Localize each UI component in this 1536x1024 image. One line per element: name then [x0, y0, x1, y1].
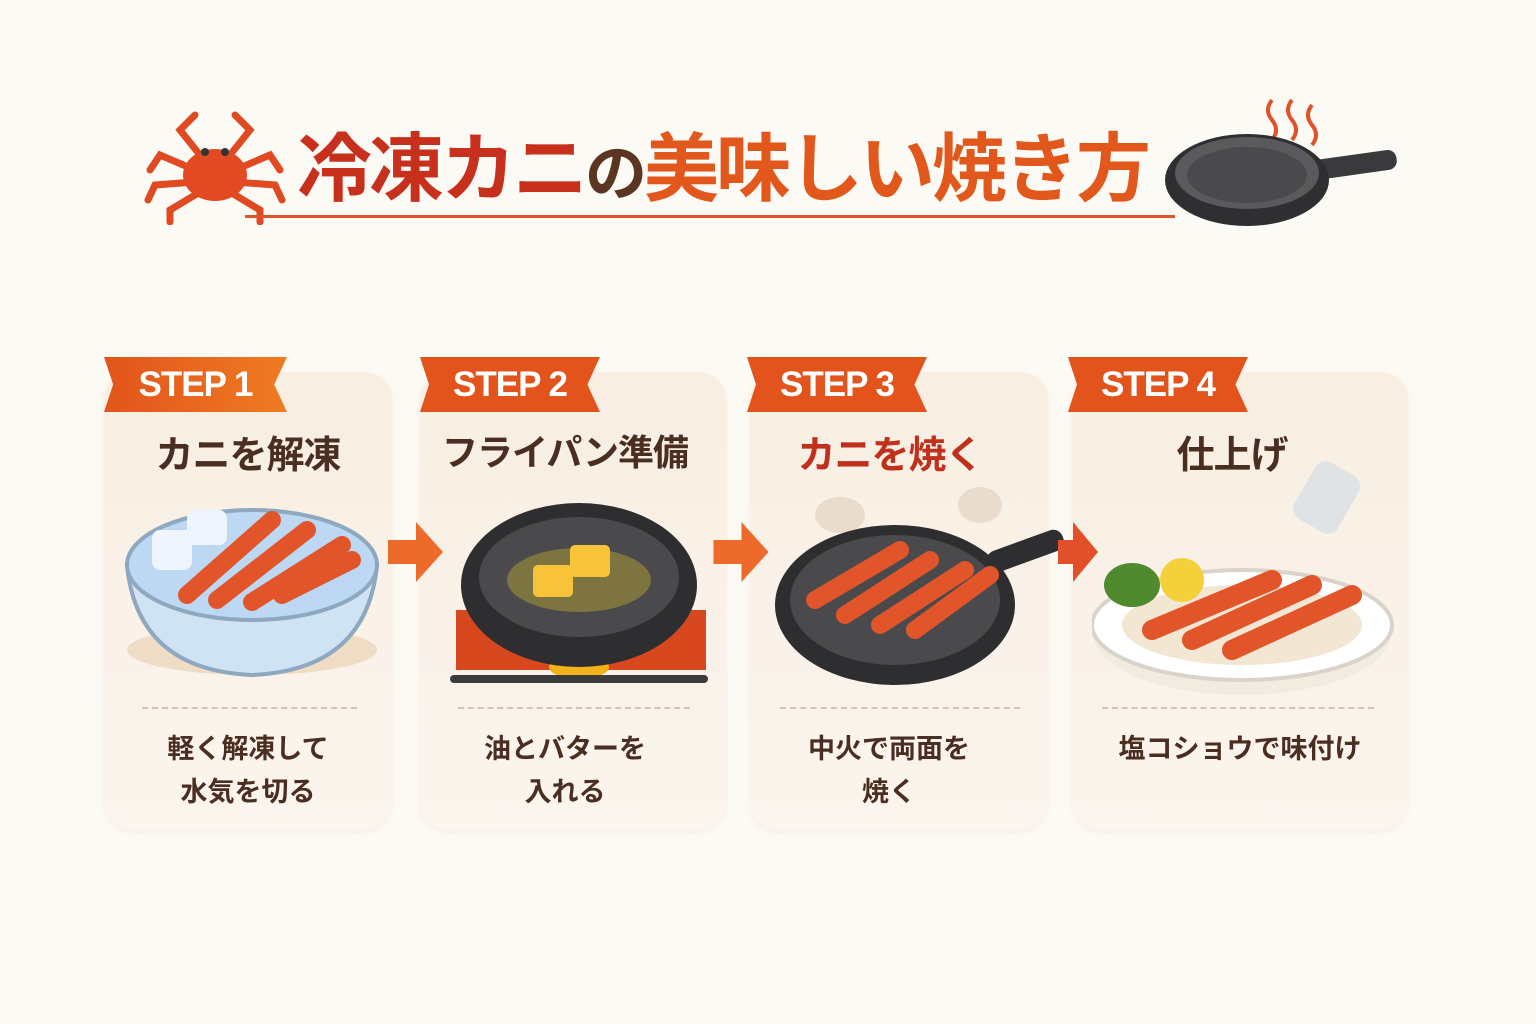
- arrow 3: [1058, 522, 1098, 582]
- description: step 3: 中火で両面を: [808, 734, 970, 764]
- underline: [245, 215, 1175, 218]
- description: step 1: 軽く解凍して: [167, 734, 329, 764]
- tab: step 2: STEP 2: [453, 365, 567, 404]
- title: [144, 98, 1397, 226]
- tab: step 2: [420, 357, 600, 412]
- tab: step 1: STEP 1: [138, 365, 252, 404]
- arrow 2: [714, 522, 768, 582]
- tab: step 3: STEP 3: [780, 365, 894, 404]
- description: step 1: 水気を切る: [180, 777, 316, 807]
- tab: step 4: [1068, 357, 1248, 412]
- illustration: pan with butter on stove: [450, 503, 708, 683]
- description: step 1: [167, 734, 329, 807]
- illustration: plated crab with lemon and salt shaker: [1092, 461, 1394, 695]
- panel: step 4: [1072, 372, 1408, 830]
- illustration: bowl of ice water with crab: [124, 508, 380, 677]
- description: step 2: 入れる: [524, 777, 606, 807]
- tab: step 1: [104, 357, 287, 412]
- description: step 4: 塩コショウで味付け: [1118, 734, 1362, 764]
- heading: step 3: カニを焼く: [797, 435, 982, 477]
- tab: step 4: STEP 4: [1101, 365, 1215, 404]
- description: step 3: 焼く: [862, 777, 916, 807]
- heading: step 4: 仕上げ: [1176, 435, 1288, 477]
- panel: step 2: [420, 372, 726, 830]
- panel: step 3: [750, 372, 1048, 830]
- arrow 1: [388, 522, 443, 582]
- description: step 2: 油とバターを: [484, 734, 646, 764]
- icon: frying pan: [1165, 98, 1397, 226]
- icon: crab: [144, 112, 286, 225]
- heading: step 2: フライパン準備: [442, 432, 688, 473]
- heading: step 1: カニを解凍: [155, 435, 340, 477]
- title text: 冷凍カニの美味しい焼き方: [297, 127, 1148, 211]
- illustration: crab legs in pan: [775, 487, 1064, 685]
- panel: step 1: [104, 372, 392, 830]
- description: step 2: [484, 734, 646, 807]
- tab: step 3: [747, 357, 927, 412]
- description: step 3: [808, 734, 970, 807]
